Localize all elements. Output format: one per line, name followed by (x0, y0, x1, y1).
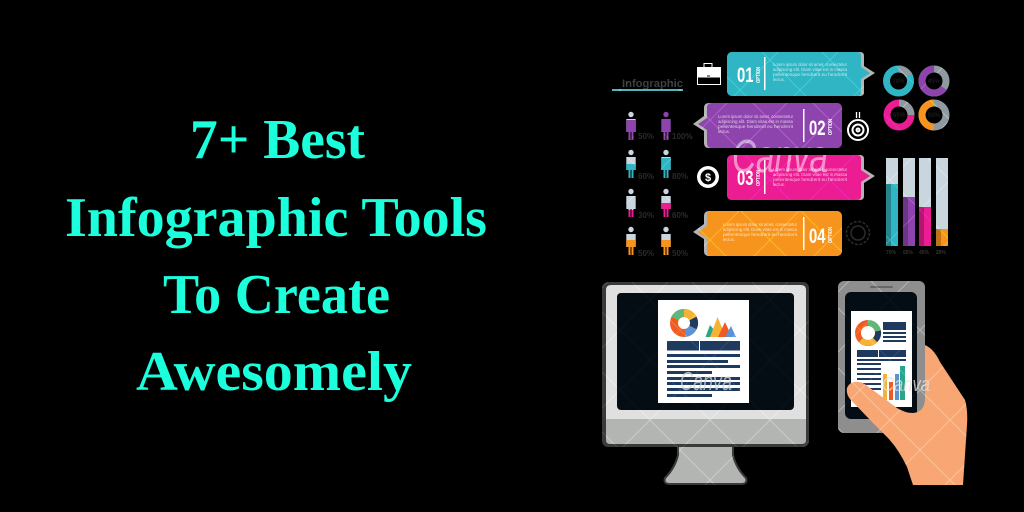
donut on document (674, 313, 694, 333)
banner 04 orange (693, 211, 842, 256)
icon: dollar coin (697, 166, 719, 188)
people chart (626, 112, 692, 258)
banner 02 purple (693, 103, 842, 148)
people chart: 50% (638, 132, 654, 141)
banner 02 purple: pellentesque hendrerit eu hendrerit (718, 124, 794, 129)
bar chart: 20% (936, 250, 947, 256)
banner 04 orange: pellentesque hendrerit eu hendrerit (723, 232, 798, 237)
banner 01 teal: OPTION (756, 67, 762, 83)
bar chart: 45% (919, 250, 930, 256)
donut charts (886, 69, 946, 127)
banner 02 purple: adipiscing elit. Diam vitae est in massa (718, 119, 793, 124)
document on monitor (658, 300, 749, 403)
banner 02 purple: 02 (809, 117, 826, 140)
banner 01 teal: pellentesque hendrerit eu hendrerit (773, 72, 848, 77)
canva watermark phone: Canva (882, 374, 930, 396)
bar chart on phone (883, 366, 905, 400)
bar chart: 55% (903, 250, 914, 256)
title: Awesomely (136, 341, 412, 403)
people chart: 60% (638, 172, 654, 181)
title: To Create (163, 264, 390, 326)
mountain chart on document (706, 317, 736, 337)
banner 03 pink: pellentesque hendrerit eu hendrerit (773, 177, 848, 182)
banner 02 purple: Lorem ipsum dolor sit amet, consectetur (718, 114, 793, 119)
banner 03 pink (727, 155, 875, 200)
people chart: 100% (672, 132, 692, 141)
banner 03 pink: 03 (737, 167, 754, 190)
icon: gear (846, 222, 870, 244)
banner 04 orange: 04 (809, 225, 826, 248)
donut charts: 55% (893, 113, 906, 119)
donut charts: 50% (928, 113, 941, 119)
banner 03 pink: Lorem ipsum dolor sit amet, consectetur (773, 167, 847, 172)
hand (847, 345, 967, 485)
people chart: 50% (638, 249, 654, 258)
banner 01 teal: 01 (737, 64, 754, 87)
banner 03 pink: adipiscing elit. Diam vitae est in massa (773, 172, 847, 177)
people chart: 50% (672, 249, 688, 258)
bar chart: 70% (886, 250, 897, 256)
bar chart (886, 158, 948, 256)
banner 02 purple: OPTION (828, 119, 834, 135)
text lines on phone (857, 322, 906, 390)
banner 01 teal: lectus. (773, 77, 785, 82)
banner 04 orange: OPTION (828, 227, 834, 243)
phone (838, 281, 925, 433)
banner 03 pink: lectus. (773, 182, 785, 187)
icon: dollar coin: $ (705, 172, 711, 184)
banner 01 teal: Lorem ipsum dolor sit amet, consectetur (773, 62, 847, 67)
monitor: Canva (680, 366, 732, 396)
title: Infographic Tools (65, 187, 487, 249)
people chart: 80% (672, 172, 688, 181)
watermark lattice (600, 45, 970, 490)
people chart: 60% (672, 211, 688, 220)
title (65, 109, 487, 403)
icon: briefcase (697, 64, 721, 84)
icon: target (848, 112, 868, 140)
banner 04 orange: adipiscing elit. Diam vitae est in massa (723, 227, 797, 232)
banner 01 teal (727, 52, 875, 96)
banner 01 teal: adipiscing elit. Diam vitae est in massa (773, 67, 847, 72)
title: 7+ Best (190, 109, 365, 171)
donut on phone (858, 323, 878, 343)
text lines on document (667, 341, 740, 397)
banner 04 orange: Lorem ipsum dolor sit amet, consectetur (723, 222, 797, 227)
donut charts: 45% (928, 79, 941, 85)
infographic heading: Infographic (622, 78, 683, 90)
donut charts: 70% (892, 79, 905, 85)
banner 02 purple: lectus. (718, 129, 730, 134)
canva watermark top: Canva (732, 130, 828, 182)
people chart: 30% (638, 211, 654, 220)
monitor (602, 282, 809, 484)
banner 04 orange: lectus. (723, 237, 735, 242)
banner 03 pink: OPTION (756, 170, 762, 186)
